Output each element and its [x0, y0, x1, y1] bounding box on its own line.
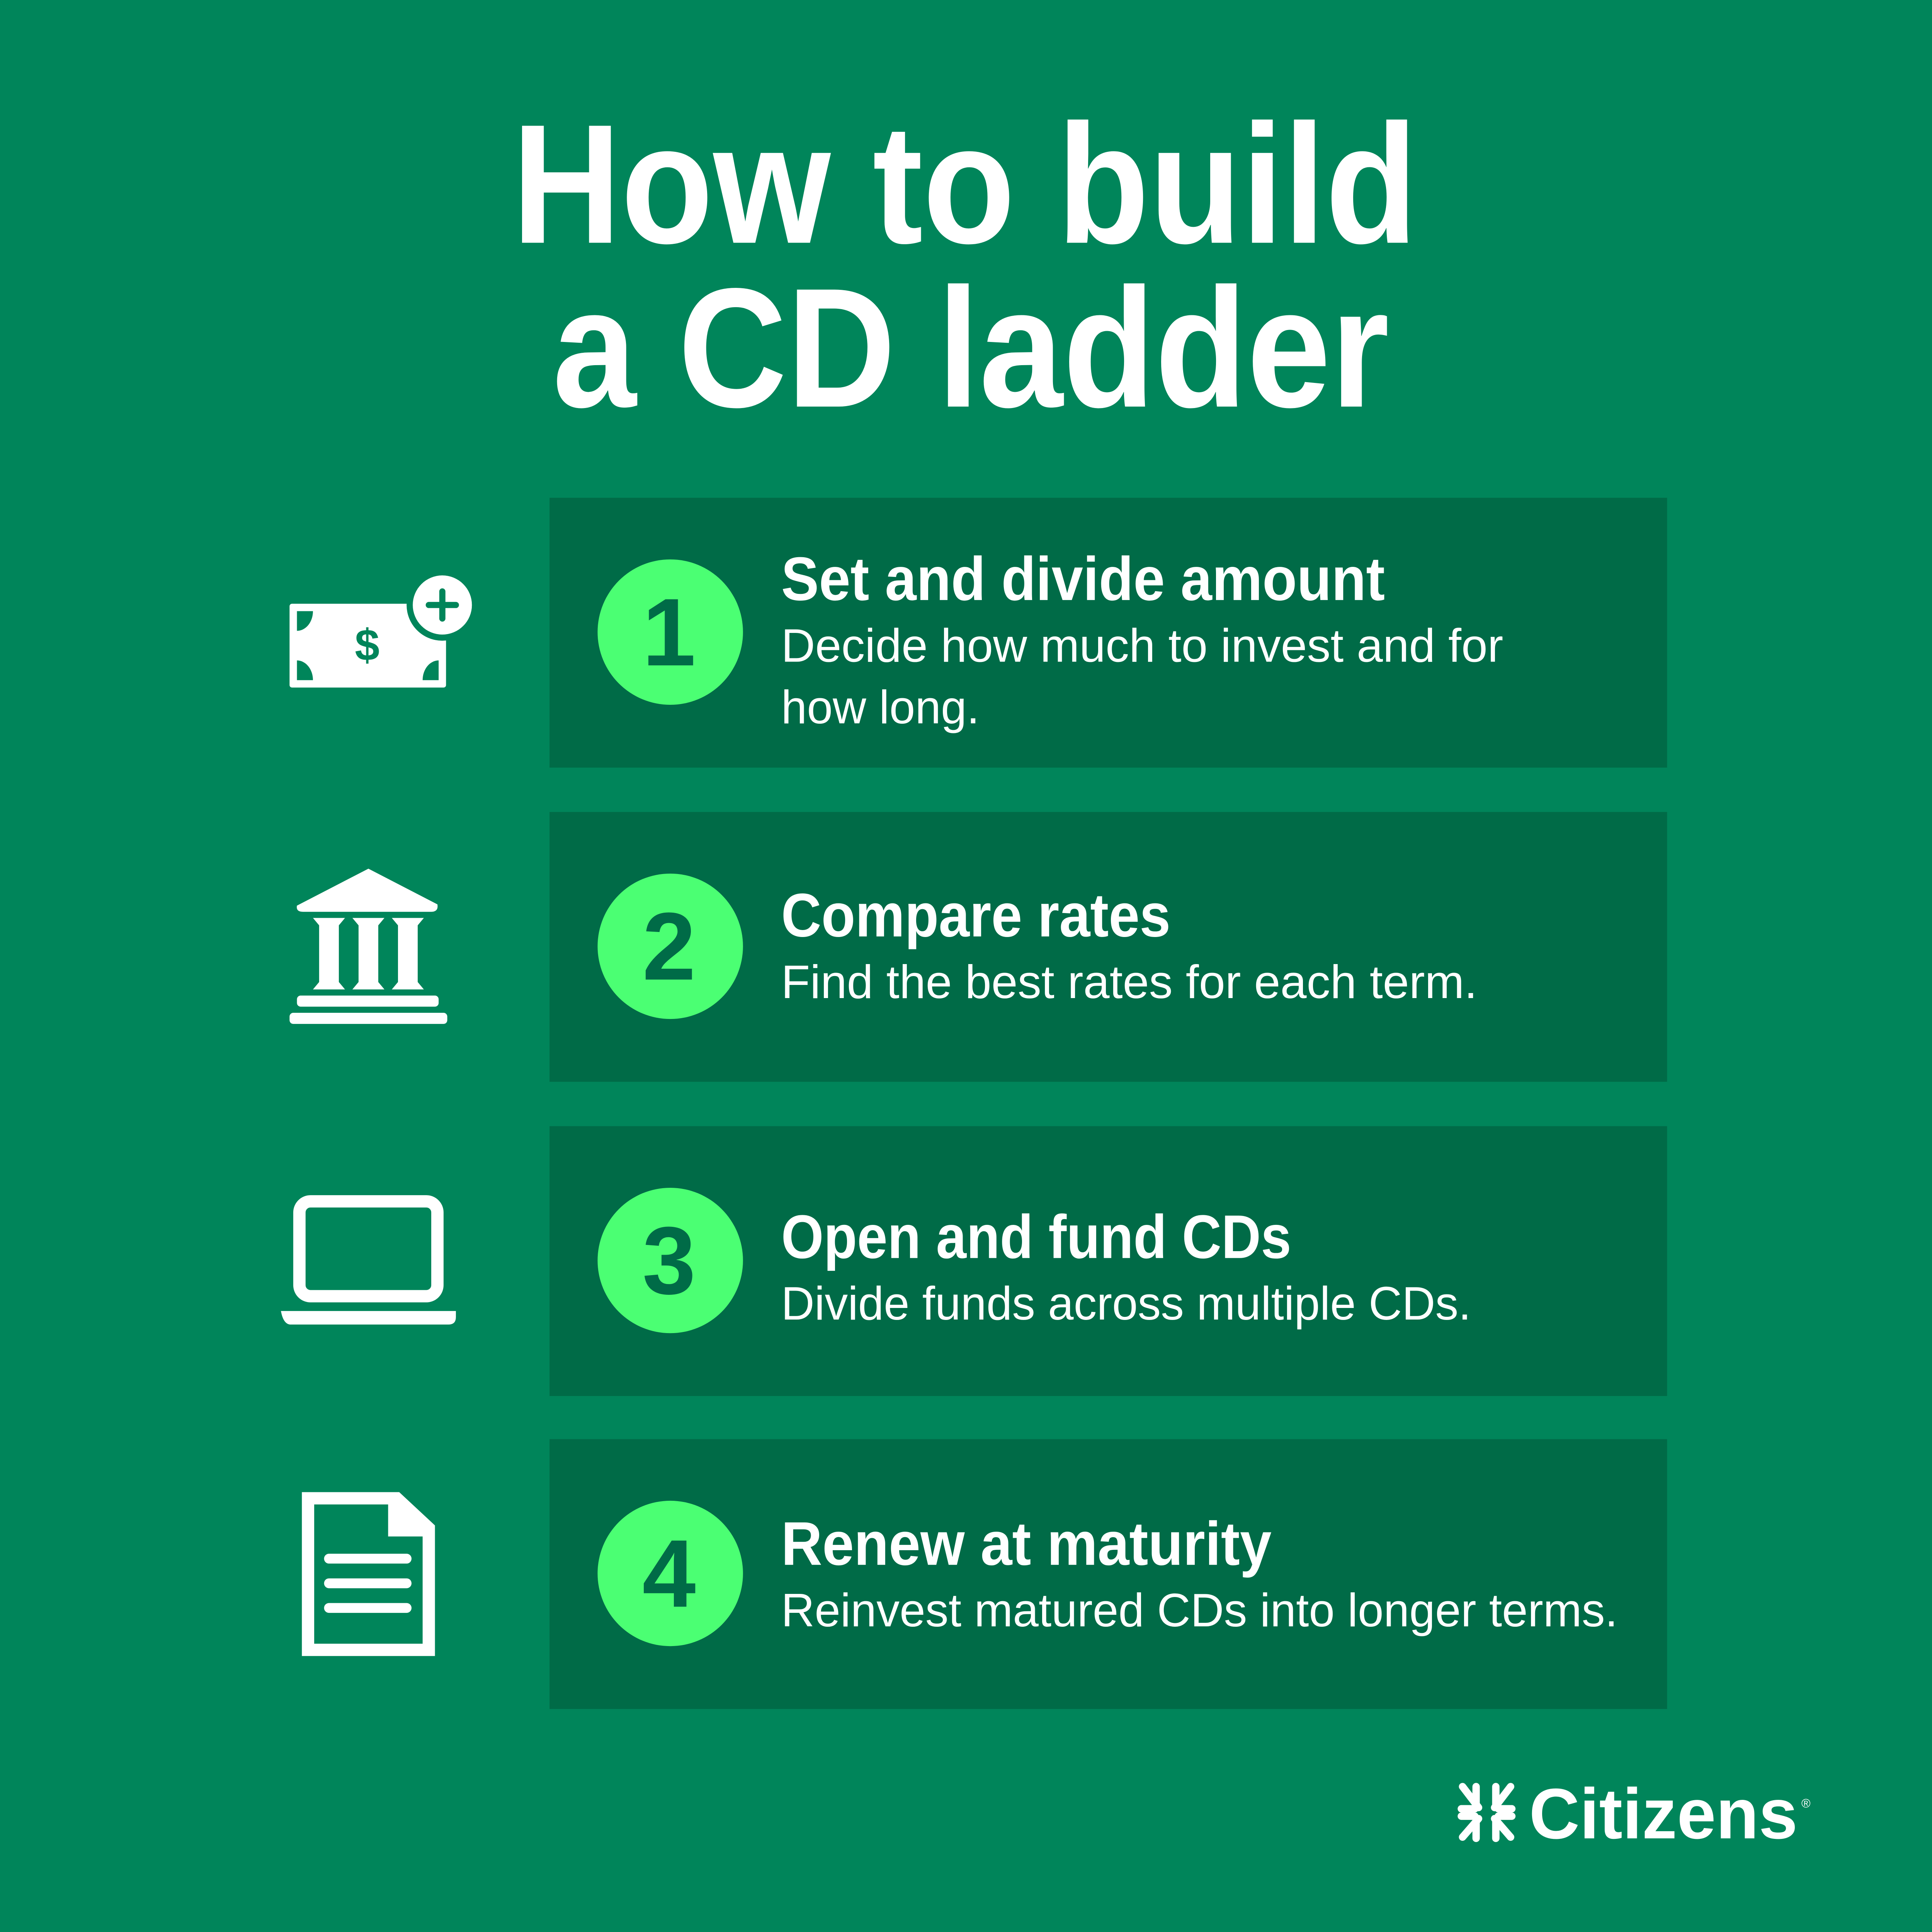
heading 3: Open and fund CDs [781, 1202, 1291, 1271]
badge 3 [598, 1188, 743, 1333]
icon: money with plus [289, 569, 478, 687]
badge 2 [598, 874, 743, 1019]
title: a CD ladder [553, 253, 1389, 443]
icon: money with plus: $ [355, 621, 379, 670]
badge 3: 3 [642, 1207, 696, 1314]
panel: step 2 [549, 812, 1667, 1082]
panel: step 3 [549, 1126, 1667, 1396]
title [512, 89, 1418, 443]
title: How to build [512, 89, 1418, 279]
badge 1 [598, 560, 743, 705]
icon: laptop [281, 1201, 456, 1325]
body 3: Divide funds across multiple CDs. [781, 1277, 1471, 1330]
logo: Citizens: Citizens [1529, 1774, 1798, 1854]
heading 1: Set and divide amount [781, 544, 1385, 613]
body 2: Find the best rates for each term. [781, 956, 1477, 1008]
panel: step 1 [549, 498, 1667, 768]
heading 2: Compare rates [781, 881, 1170, 949]
heading 4: Renew at maturity [781, 1509, 1272, 1578]
body 1: Decide how much to invest and for [781, 619, 1503, 672]
badge 4: 4 [642, 1520, 696, 1627]
icon: bank [289, 869, 447, 1024]
badge 4 [598, 1501, 743, 1646]
badge 2: 2 [642, 893, 696, 1000]
body 4: Reinvest matured CDs into longer terms. [781, 1584, 1618, 1636]
body 1: how long. [781, 681, 980, 733]
badge 1: 1 [642, 578, 696, 686]
logo: Citizens: ® [1801, 1796, 1810, 1810]
icon: document [302, 1492, 435, 1656]
body 1 [781, 619, 1503, 733]
panel: step 4 [549, 1439, 1667, 1709]
